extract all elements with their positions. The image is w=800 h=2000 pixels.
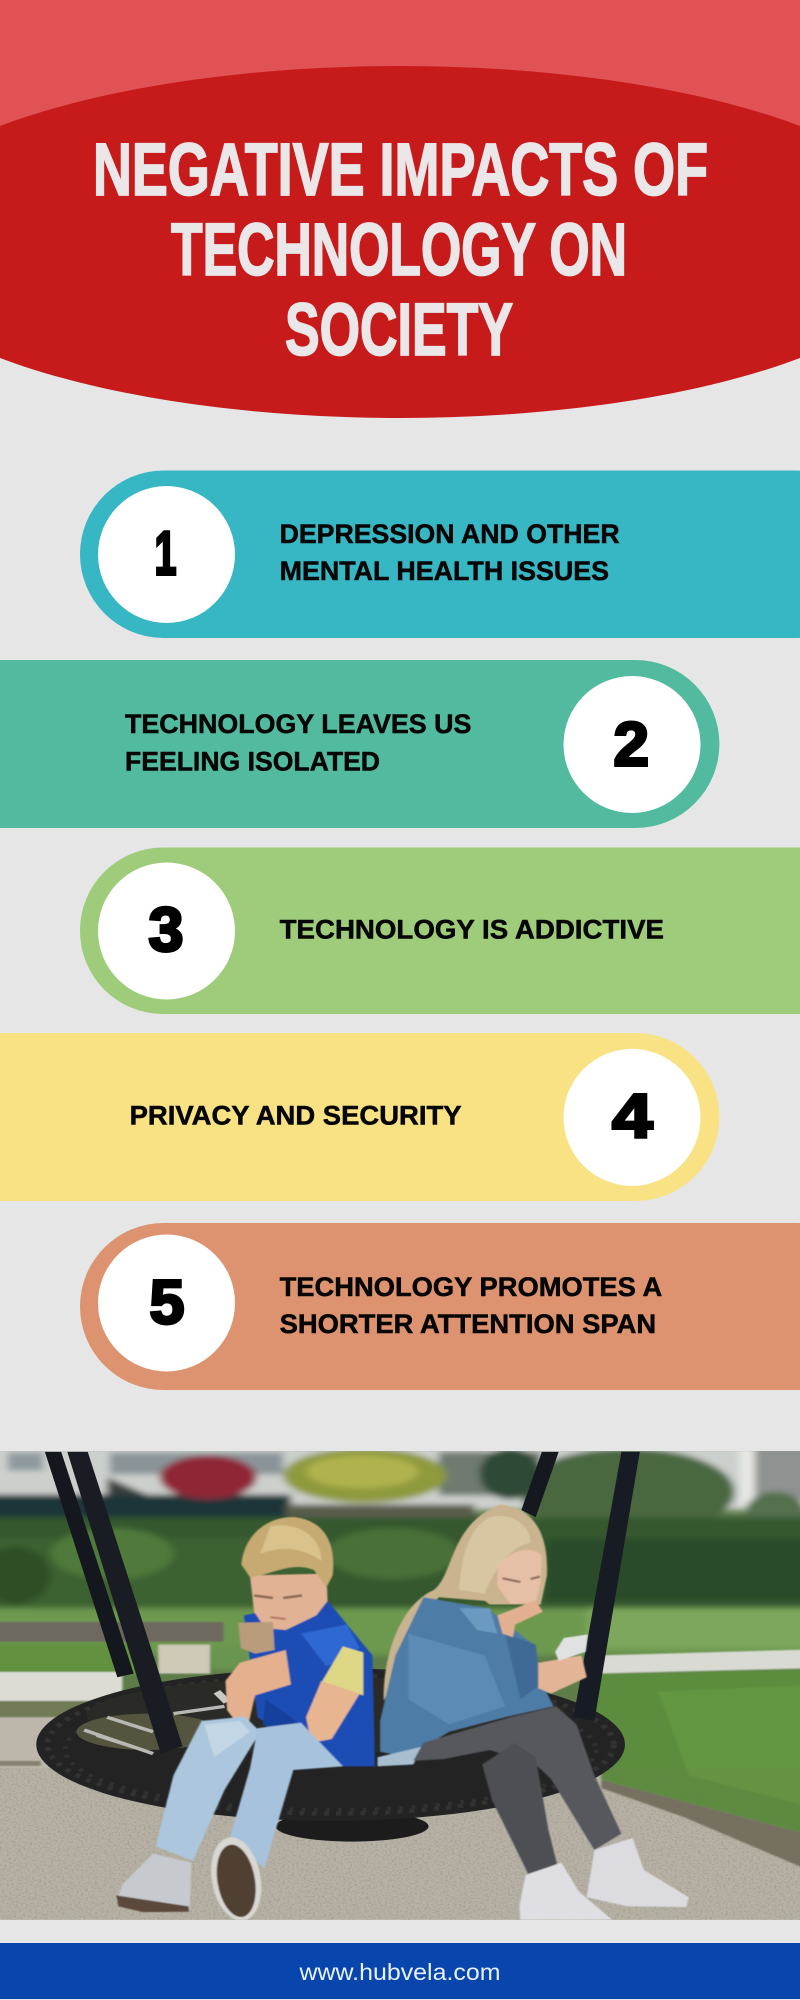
text: item 2: FEELING ISOLATED	[125, 746, 380, 776]
hands	[497, 1600, 543, 1637]
text: item 5: TECHNOLOGY PROMOTES A	[280, 1272, 662, 1302]
panel: item 2	[0, 660, 719, 828]
number 5: 5	[150, 1268, 184, 1338]
text: item 2: TECHNOLOGY LEAVES US	[125, 709, 471, 739]
phone	[555, 1634, 588, 1661]
swing ring	[276, 1818, 429, 1842]
photo: two children on a swing using phones	[0, 1430, 800, 1924]
face	[497, 1550, 542, 1604]
number 2: 2	[614, 710, 649, 780]
text: item 1: DEPRESSION AND OTHER	[280, 519, 620, 549]
jacket	[380, 1597, 554, 1757]
panel: item 5	[80, 1223, 800, 1390]
back poles	[45, 1452, 134, 1677]
number 3: 3	[148, 896, 184, 965]
front poles	[67, 1452, 183, 1754]
title: SOCIETY	[285, 288, 513, 371]
shoes	[116, 1854, 191, 1912]
footer bar	[0, 1943, 800, 1999]
text: item 3: TECHNOLOGY IS ADDICTIVE	[280, 914, 664, 944]
text: item 4: PRIVACY AND SECURITY	[130, 1101, 462, 1131]
text: item 1: MENTAL HEALTH ISSUES	[280, 556, 609, 586]
phone	[238, 1622, 274, 1654]
number 3	[98, 862, 235, 1000]
shorts	[378, 1746, 423, 1766]
jeans	[156, 1717, 260, 1861]
girl	[378, 1505, 689, 1920]
website: www.hubvela.com	[298, 1959, 500, 1985]
panel: item 3	[80, 848, 800, 1014]
header banner	[0, 0, 800, 418]
number 2	[564, 676, 700, 813]
hair	[384, 1505, 547, 1701]
title	[93, 128, 708, 371]
arms and hands	[224, 1649, 292, 1722]
leggings	[413, 1706, 621, 1850]
gravel texture	[0, 1768, 800, 1920]
number 4: 4	[612, 1082, 653, 1151]
panel: item 1	[80, 470, 800, 638]
hair	[241, 1517, 333, 1587]
number 5	[98, 1234, 235, 1372]
number 1	[98, 486, 235, 623]
panel: item 4	[0, 1033, 719, 1201]
shoes	[587, 1838, 689, 1907]
bench	[0, 1622, 223, 1642]
face	[250, 1574, 328, 1630]
number 1: 1	[154, 520, 176, 588]
number 4	[564, 1049, 700, 1186]
text: item 5: SHORTER ATTENTION SPAN	[280, 1309, 656, 1339]
boy	[116, 1517, 375, 1922]
